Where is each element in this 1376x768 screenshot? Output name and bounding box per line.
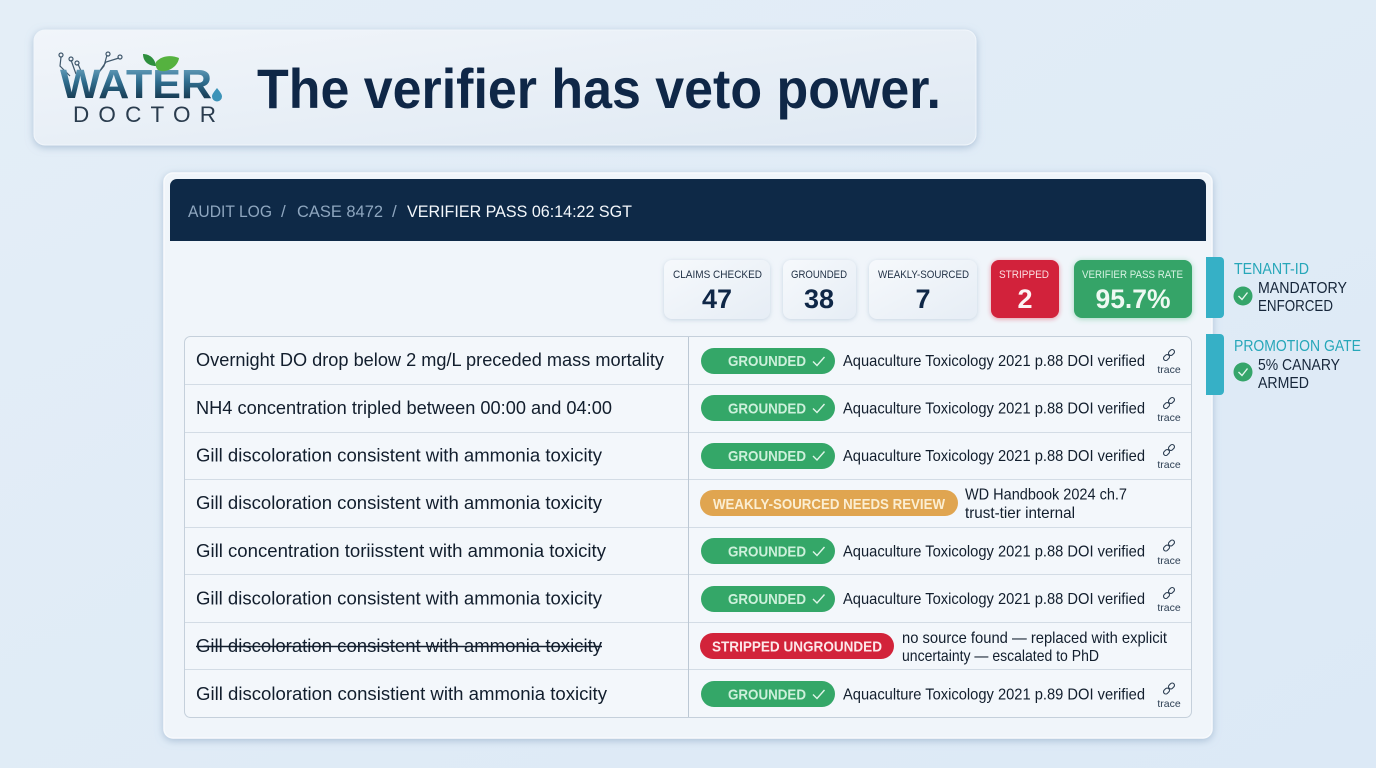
row 1: Overnight DO drop below 2 mg/L preceded mass mortality <box>196 349 665 370</box>
status pill: grounded: GROUNDED <box>728 686 806 704</box>
row 8: Gill discoloration consistient with ammonia toxicity <box>196 683 608 704</box>
header bar: breadcrumb: / <box>392 202 397 221</box>
row 6: Gill discoloration consistent with ammonia toxicity <box>196 588 603 608</box>
header bar: breadcrumb <box>170 179 1206 241</box>
title text: The verifier has veto power. <box>257 57 941 120</box>
icon: check <box>1234 286 1252 306</box>
annotation: tenant-id: TENANT-ID <box>1234 261 1309 278</box>
status pill: grounded: GROUNDED <box>728 400 806 418</box>
header bar: breadcrumb: / <box>281 202 286 221</box>
trace link: trace <box>1157 412 1181 424</box>
row 5: Gill concentration toriisstent with ammonia toxicity <box>196 540 607 561</box>
header bar: breadcrumb: VERIFIER PASS 06:14:22 SGT <box>407 202 632 221</box>
stat: verifier pass rate: VERIFIER PASS RATE <box>1082 269 1183 281</box>
row 4 <box>196 486 1127 522</box>
trace link: trace <box>1157 555 1181 567</box>
annotation: promotion gate: 5% CANARY <box>1258 357 1340 374</box>
row 6: Aquaculture Toxicology 2021 p.88 DOI verified <box>843 591 1145 608</box>
trace link: trace <box>1157 459 1181 471</box>
row 7: stripped claim: uncertainty — escalated to PhD <box>902 648 1099 665</box>
logo: Water Doctor: DOCTOR <box>73 102 216 127</box>
header bar: breadcrumb: AUDIT LOG <box>188 202 272 221</box>
row 6 <box>196 586 1181 614</box>
trace link <box>1157 587 1181 614</box>
row 1: Aquaculture Toxicology 2021 p.88 DOI verified <box>843 353 1145 370</box>
row 1 <box>196 348 1181 376</box>
trace link: trace <box>1157 698 1181 710</box>
row 7: stripped claim: no source found — replaced with explicit <box>902 630 1168 647</box>
icon: check <box>1234 362 1252 382</box>
status pill: grounded: GROUNDED <box>728 544 806 560</box>
row 2: NH4 concentration tripled between 00:00 and 04:00 <box>196 397 612 418</box>
row 4: Gill discoloration consistent with ammonia toxicity <box>196 492 603 513</box>
trace link <box>1157 682 1181 710</box>
stat: grounded: 38 <box>804 284 834 314</box>
row 8: Aquaculture Toxicology 2021 p.89 DOI verified <box>843 686 1145 704</box>
annotation: promotion gate: ARMED <box>1258 375 1309 392</box>
annotation: tenant-id: ENFORCED <box>1258 298 1333 315</box>
row 2: Aquaculture Toxicology 2021 p.88 DOI verified <box>843 400 1145 418</box>
stat: claims checked: CLAIMS CHECKED <box>673 269 762 281</box>
annotation: tenant-id <box>1206 257 1347 318</box>
row 8 <box>196 681 1181 710</box>
stat: grounded <box>783 260 856 319</box>
row 5: Aquaculture Toxicology 2021 p.88 DOI verified <box>843 544 1145 560</box>
stat: claims checked <box>664 260 770 319</box>
status pill: grounded: GROUNDED <box>728 353 806 370</box>
status pill: weakly-sourced: WEAKLY-SOURCED NEEDS REVIEW <box>713 496 946 513</box>
status pill: stripped: STRIPPED UNGROUNDED <box>712 638 882 656</box>
stat: stripped: STRIPPED <box>999 269 1049 281</box>
stat: claims checked: 47 <box>702 284 732 314</box>
annotation: promotion gate <box>1206 334 1361 395</box>
status pill: grounded <box>701 538 835 564</box>
logo: Water Doctor <box>59 52 222 127</box>
row 2 <box>196 395 1181 424</box>
trace link <box>1157 397 1181 424</box>
header bar: breadcrumb: CASE 8472 <box>297 202 383 221</box>
trace link: trace <box>1157 364 1181 376</box>
row 4: trust-tier internal <box>965 505 1075 522</box>
status pill: grounded <box>701 586 835 612</box>
status pill: grounded: GROUNDED <box>728 591 806 608</box>
status pill: grounded <box>701 348 835 374</box>
annotation: promotion gate: PROMOTION GATE <box>1234 338 1361 355</box>
logo: Water Doctor: WATER <box>60 61 212 107</box>
status pill: stripped <box>700 633 894 659</box>
stat: verifier pass rate: 95.7% <box>1096 284 1170 314</box>
status pill: grounded: GROUNDED <box>728 448 806 465</box>
stat: weakly-sourced: WEAKLY-SOURCED <box>878 269 969 281</box>
trace link <box>1157 539 1181 567</box>
stat: verifier pass rate <box>1074 260 1192 318</box>
row 4: WD Handbook 2024 ch.7 <box>965 486 1127 504</box>
stat: stripped: 2 <box>1017 284 1033 314</box>
row 7: stripped claim <box>196 630 1168 665</box>
trace link <box>1157 444 1181 471</box>
stat: stripped <box>991 260 1059 318</box>
trace link <box>1157 349 1181 376</box>
row 3 <box>196 443 1181 471</box>
status pill: weakly-sourced <box>700 490 958 516</box>
annotation: tenant-id: MANDATORY <box>1258 280 1347 297</box>
stat: weakly-sourced <box>869 260 977 319</box>
panel: audit log <box>164 173 1212 738</box>
stat: weakly-sourced: 7 <box>915 284 931 314</box>
title card <box>34 30 976 145</box>
row 7: stripped claim: Gill discoloration consistent with ammonia toxicity <box>196 635 603 656</box>
status pill: grounded <box>701 681 835 707</box>
row 3: Aquaculture Toxicology 2021 p.88 DOI verified <box>843 448 1145 465</box>
row 3: Gill discoloration consistent with ammonia toxicity <box>196 444 603 466</box>
trace link: trace <box>1157 602 1181 614</box>
status pill: grounded <box>701 443 835 469</box>
stat: grounded: GROUNDED <box>791 269 847 281</box>
claims table <box>184 336 1192 718</box>
row 5 <box>196 538 1181 567</box>
status pill: grounded <box>701 395 835 421</box>
